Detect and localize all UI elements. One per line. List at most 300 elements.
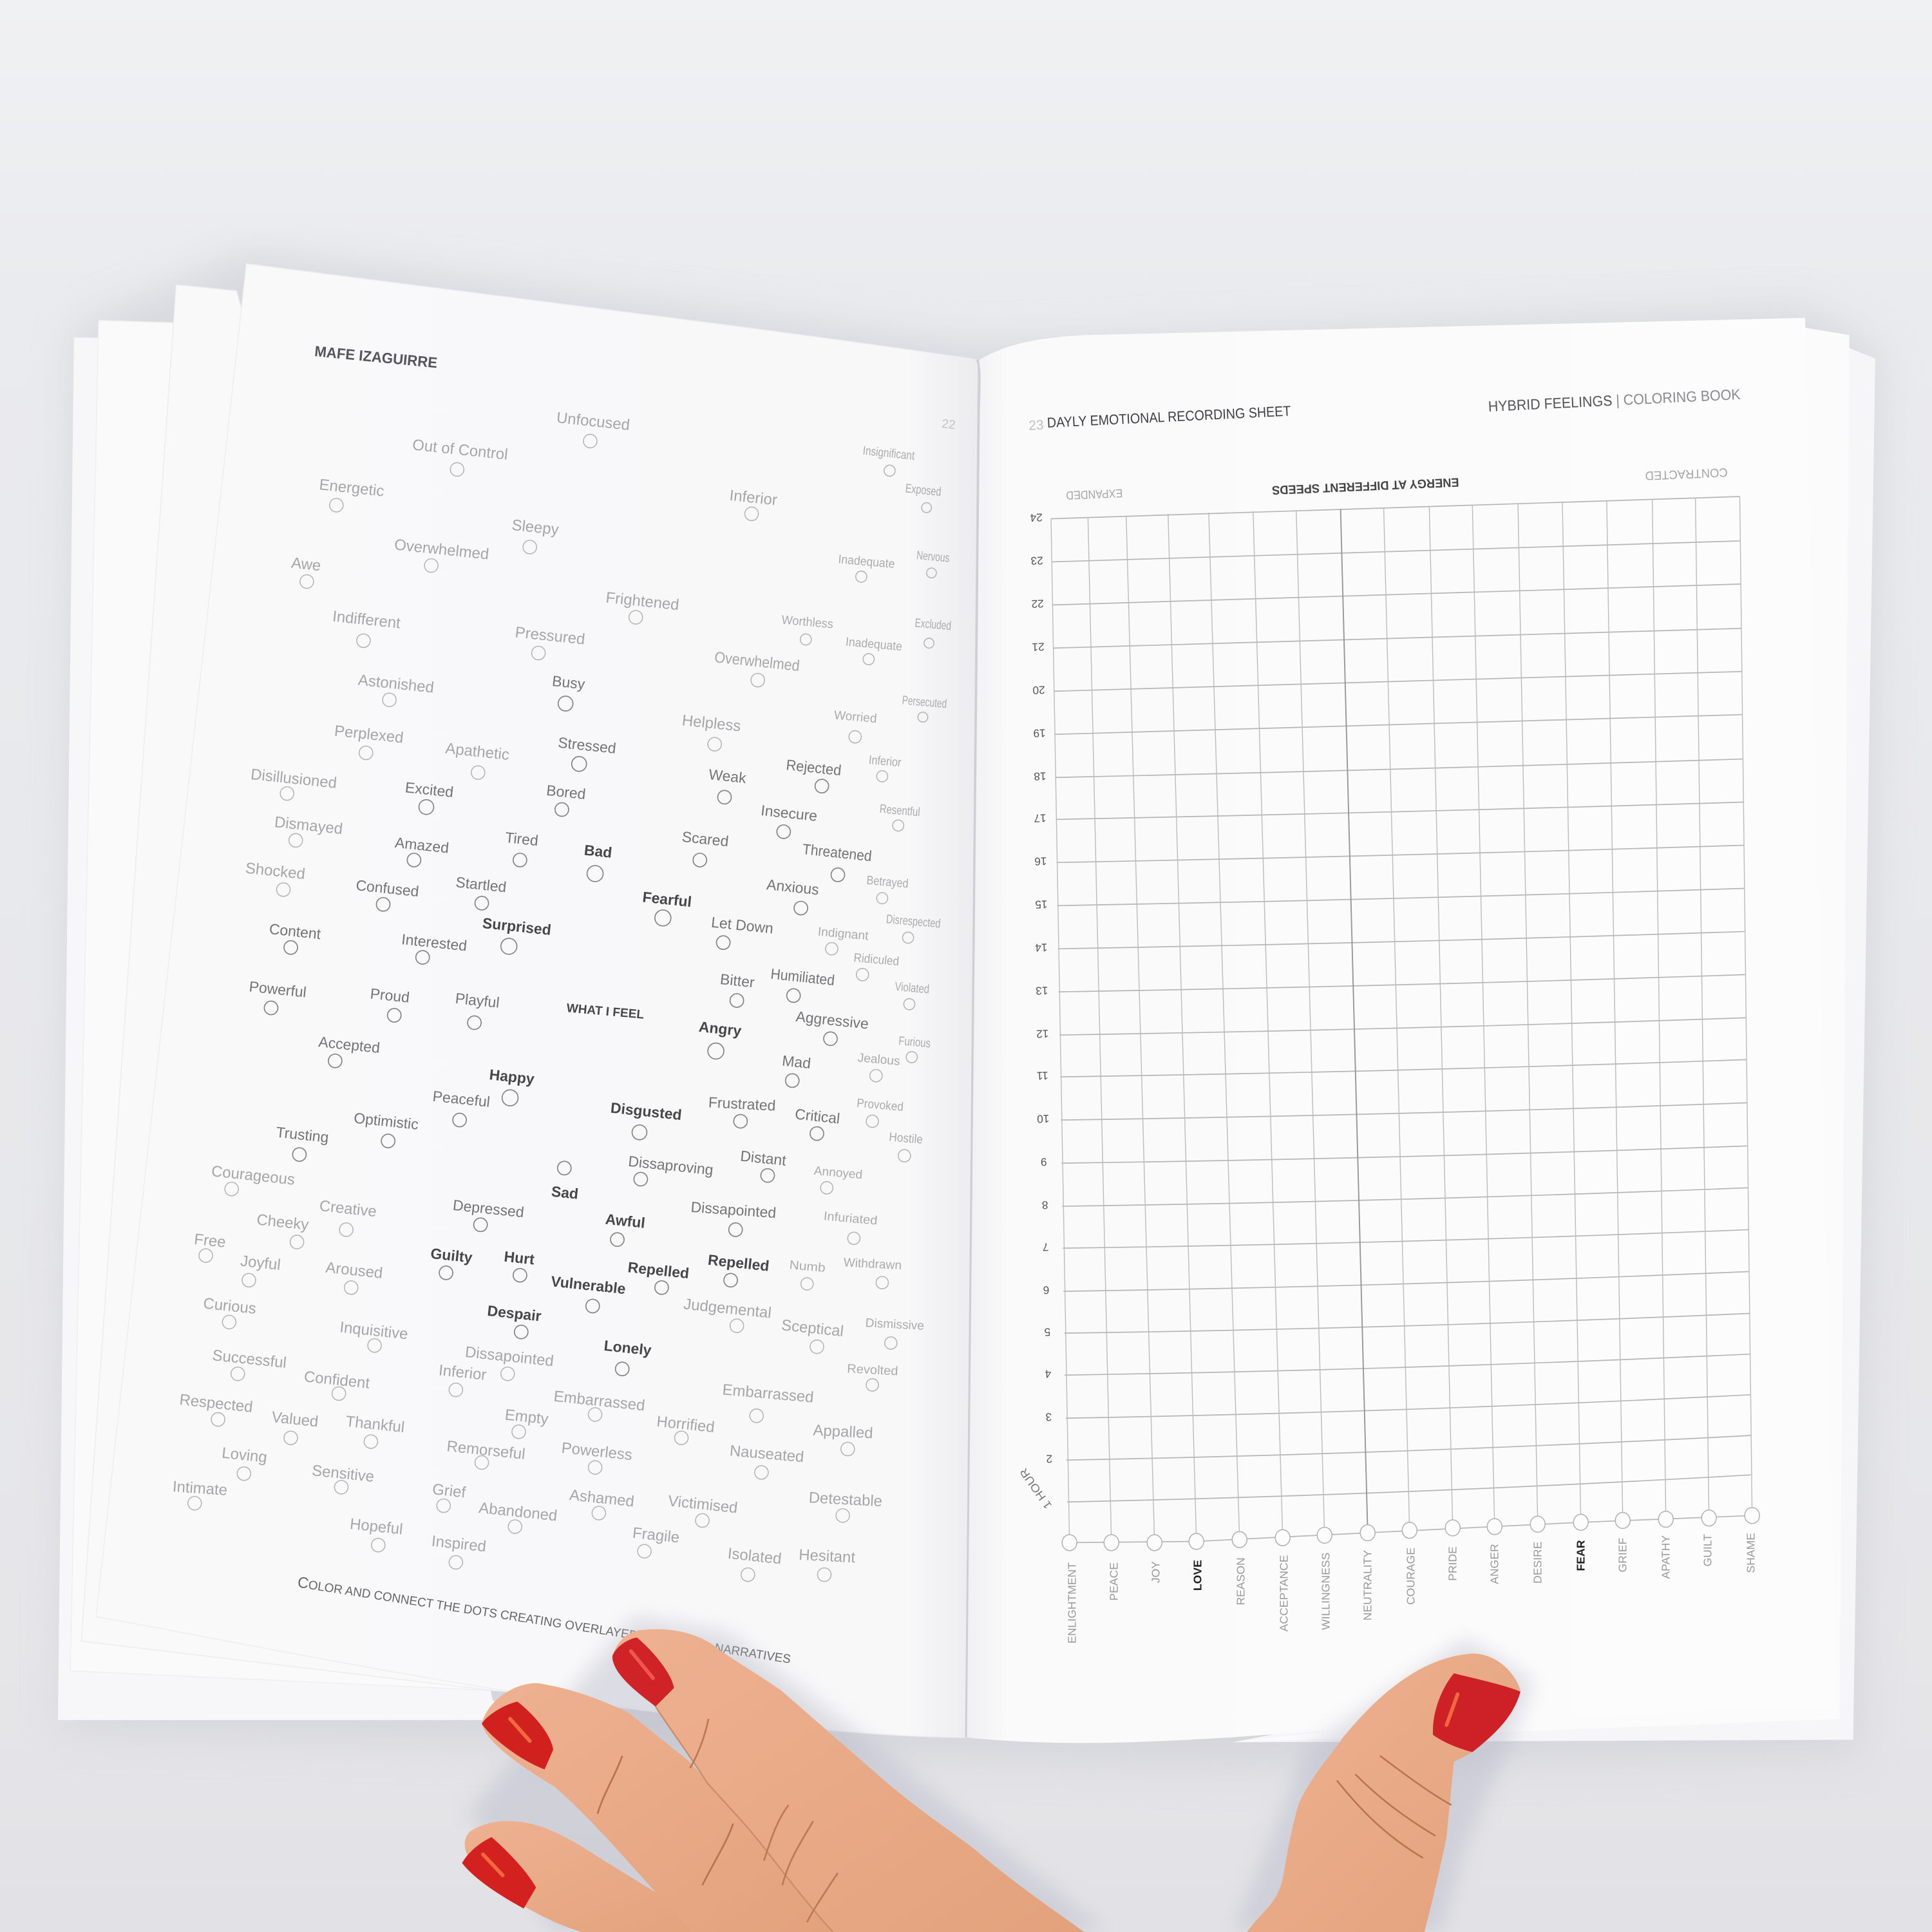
word: Despair: Despair: [486, 1302, 542, 1325]
word: Scared: Scared: [681, 828, 730, 849]
word: Resentful: [879, 801, 921, 831]
word: Playful: [455, 990, 500, 1030]
grid horizontal hour lines: [1051, 497, 1751, 1502]
word: Anxious: [766, 876, 820, 915]
word: Fearful: [642, 888, 692, 926]
word: Indignant: [817, 925, 869, 955]
emotion scale labels: REASON: [1234, 1557, 1247, 1605]
word: Abandoned: Abandoned: [478, 1499, 558, 1525]
hour axis numbers: [1030, 511, 1052, 1466]
right under-page stack: [1232, 328, 1875, 1742]
word: Indifferent: [332, 608, 401, 647]
word: Dissapointed: Dissapointed: [464, 1343, 554, 1370]
word: Energetic: [318, 476, 385, 512]
word: Revolted: Revolted: [847, 1362, 898, 1378]
emotion scale labels: DESIRE: [1531, 1541, 1544, 1584]
word: Insecure: Insecure: [760, 802, 818, 824]
word: Excluded: [914, 616, 952, 648]
page number 23: 23: [1028, 418, 1044, 433]
hour axis numbers: 14: [1035, 941, 1048, 954]
word: Perplexed: Perplexed: [334, 722, 404, 747]
word: Unfocused: Unfocused: [556, 409, 630, 434]
left under-page stack: [58, 285, 616, 1720]
word: Powerless: Powerless: [561, 1439, 633, 1464]
word: Startled: [455, 873, 507, 910]
word: Threatened: [802, 840, 873, 882]
word: Annoyed: Annoyed: [813, 1164, 863, 1182]
word: Inferior: Inferior: [868, 753, 902, 770]
finger: middle: [612, 1629, 1084, 1932]
word: Violated: Violated: [895, 979, 930, 996]
instruction caption: COLOR AND CONNECT THE DOTS CREATING OVERLAYED EMOTIONAL NARRATIVES: [296, 1574, 792, 1667]
hour axis numbers: 21: [1032, 640, 1045, 654]
word: Frightened: Frightened: [605, 589, 680, 614]
word: Aggressive: [795, 1008, 869, 1045]
hour axis numbers: 20: [1032, 683, 1045, 697]
word: Courageous: Courageous: [211, 1162, 296, 1189]
word: Disrespected: Disrespected: [886, 912, 941, 931]
word: Content: [269, 920, 322, 954]
author name: MAFE IZAGUIRRE: [314, 343, 438, 371]
hour axis numbers: 24: [1030, 511, 1043, 524]
hour axis numbers: 23: [1030, 554, 1043, 567]
word: Hesitant: Hesitant: [799, 1546, 856, 1566]
word: Inferior: [438, 1361, 488, 1397]
word: Jealous: [857, 1051, 900, 1082]
word: Threatened: Threatened: [802, 840, 873, 864]
word: Sceptical: [781, 1316, 844, 1354]
book shadow: [62, 252, 1879, 1768]
hour axis numbers: 17: [1034, 811, 1046, 825]
word: Bad: [583, 842, 613, 882]
word: Peaceful: Peaceful: [432, 1088, 491, 1110]
hour axis numbers: 4: [1045, 1367, 1052, 1381]
word: Loving: Loving: [221, 1444, 268, 1466]
word: Revolted: [847, 1362, 898, 1391]
word: Shocked: Shocked: [245, 860, 306, 883]
hour axis numbers: 11: [1037, 1069, 1048, 1083]
word: Inspired: Inspired: [431, 1533, 487, 1555]
word: Repelled: [707, 1251, 770, 1287]
word: Inquisitive: Inquisitive: [339, 1319, 409, 1343]
word: Lonely: Lonely: [603, 1337, 652, 1359]
upside-down label: contracted: CONTRACTED: [1645, 465, 1728, 482]
word: Accepted: [317, 1033, 381, 1068]
center heading: what i feel: WHAT I FEEL: [566, 1001, 645, 1022]
word: Peaceful: [432, 1088, 491, 1127]
word: Out of Control: Out of Control: [412, 436, 509, 464]
upside-down heading: energy at different speeds: ENERGY AT DIFFERENT SPEEDS: [1271, 475, 1459, 497]
book gutter: [966, 360, 980, 1738]
word: Interested: Interested: [401, 931, 468, 954]
emotion scale labels: ANGER: [1488, 1544, 1501, 1584]
word: Furious: [898, 1033, 931, 1063]
word: Critical: [794, 1106, 841, 1141]
hour axis numbers: 2: [1046, 1452, 1052, 1466]
word: Despair: [486, 1302, 542, 1339]
word: Cheeky: [256, 1211, 310, 1249]
word: Intimate: Intimate: [172, 1478, 228, 1499]
hour axis numbers: 12: [1036, 1027, 1049, 1041]
word: Overwhelmed: Overwhelmed: [393, 536, 489, 564]
word: Playful: Playful: [455, 990, 500, 1011]
word: Humiliated: [770, 965, 835, 1002]
word: Humiliated: Humiliated: [770, 965, 835, 989]
word: Worthless: Worthless: [781, 612, 834, 631]
word: Nauseated: [729, 1442, 804, 1479]
word: Tired: Tired: [504, 829, 539, 849]
word: Dissapointed: Dissapointed: [690, 1198, 777, 1221]
word: Dismayed: Dismayed: [274, 813, 343, 838]
word: Persecuted: [902, 693, 947, 722]
word: Numb: [789, 1258, 826, 1290]
word: Depressed: [452, 1197, 525, 1231]
word: Scared: [681, 828, 730, 867]
word: Sensitive: Sensitive: [311, 1462, 375, 1486]
emotion scale labels: FEAR: [1574, 1540, 1587, 1571]
word: Provoked: [856, 1096, 904, 1128]
word: Fragile: Fragile: [632, 1524, 680, 1546]
word: Busy: Busy: [551, 672, 586, 692]
word: Stressed: Stressed: [557, 734, 617, 757]
word: Apathetic: [444, 740, 510, 779]
word: Hurt: [504, 1248, 535, 1282]
hour axis numbers: 7: [1042, 1240, 1049, 1254]
word: Confused: [355, 876, 420, 911]
word: Overwhelmed: [714, 648, 800, 687]
word: Sad: Sad: [551, 1183, 579, 1202]
word: Hostile: [889, 1130, 923, 1162]
hour axis numbers: 13: [1036, 984, 1048, 998]
word: Loving: [221, 1444, 268, 1481]
word: Awful: [605, 1211, 646, 1246]
word: Inadequate: [838, 552, 895, 582]
word: Aggressive: Aggressive: [795, 1008, 869, 1032]
word: Proud: [370, 985, 410, 1022]
word: Hesitant: [799, 1546, 856, 1582]
word: Trusting: [275, 1124, 330, 1161]
emotion scale labels: ENLIGHTMENT: [1065, 1562, 1078, 1643]
word: Ashamed: Ashamed: [569, 1486, 635, 1510]
emotion scale labels: JOY: [1149, 1561, 1162, 1583]
word: Intimate: [172, 1478, 228, 1510]
word: Insecure: [760, 802, 818, 838]
word: Hopeful: Hopeful: [349, 1515, 404, 1538]
word: Grief: Grief: [431, 1481, 467, 1501]
word: Guilty: Guilty: [430, 1245, 473, 1266]
word: Angry: Angry: [698, 1018, 743, 1039]
word: Worried: Worried: [833, 708, 877, 726]
word: Successful: Successful: [211, 1347, 287, 1372]
hand: fingers: [462, 1629, 1520, 1932]
word: Happy: [489, 1066, 535, 1106]
word: Let Down: [710, 914, 774, 949]
word: Surprised: Surprised: [482, 914, 552, 938]
finger: pinky: [462, 1821, 727, 1932]
word: Empty: Empty: [504, 1406, 549, 1428]
word: Anxious: Anxious: [766, 876, 820, 898]
word: Repelled: Repelled: [707, 1251, 770, 1274]
emotion scale labels: GRIEF: [1616, 1538, 1629, 1573]
word: Ridiculed: Ridiculed: [853, 951, 900, 968]
word: Shocked: [245, 860, 306, 896]
word: Out of Control: [412, 436, 509, 476]
word: Confident: Confident: [303, 1368, 371, 1392]
hour axis numbers: 9: [1041, 1155, 1047, 1169]
word: Weak: [708, 766, 747, 804]
word: Surprised: [482, 914, 552, 954]
word: Happy: Happy: [489, 1066, 535, 1088]
axis label: 1 hour: 1 HOUR: [1017, 1466, 1054, 1511]
sheet title: DAYLY EMOTIONAL RECORDING SHEET: [1046, 402, 1291, 431]
word: Inadequate: Inadequate: [845, 634, 903, 653]
word: Joyful: [240, 1253, 281, 1287]
word: Helpless: [681, 712, 742, 751]
emotion scale labels: PEACE: [1107, 1562, 1120, 1601]
word: Frustrated: Frustrated: [708, 1094, 776, 1114]
word: Inferior: [728, 487, 778, 520]
word: Joyful: Joyful: [240, 1253, 281, 1274]
word: Free: Free: [193, 1231, 227, 1251]
word: Busy: [551, 672, 586, 711]
word: Betrayed: [866, 873, 909, 904]
word: Sceptical: Sceptical: [781, 1316, 844, 1340]
word: Persecuted: Persecuted: [902, 693, 947, 711]
word: Inspired: [431, 1533, 487, 1569]
word: Dismissive: Dismissive: [865, 1316, 925, 1333]
word: Bitter: [719, 971, 755, 1007]
word: Bored: [545, 782, 587, 817]
word: Lonely: [603, 1337, 652, 1376]
word: Repelled: [627, 1258, 690, 1294]
word: Aroused: Aroused: [325, 1259, 384, 1282]
word: Ridiculed: [853, 951, 900, 981]
word: Startled: Startled: [455, 873, 507, 895]
word: Embarrassed: Embarrassed: [722, 1381, 815, 1406]
word: Powerful: Powerful: [249, 978, 307, 1001]
word: Inferior: Inferior: [728, 487, 778, 509]
word: Annoyed: [813, 1164, 863, 1194]
emotion scale labels: PRIDE: [1446, 1546, 1459, 1581]
word: Sleepy: [511, 516, 560, 554]
finger shadows: [468, 1616, 1534, 1932]
word: Sad: [551, 1161, 579, 1202]
word: Remorseful: Remorseful: [446, 1437, 526, 1463]
hour axis numbers: 10: [1037, 1112, 1050, 1126]
word: Exposed: [905, 481, 942, 513]
word: Repelled: Repelled: [627, 1258, 690, 1282]
word: Let Down: Let Down: [710, 914, 774, 937]
word: Appalled: [813, 1421, 873, 1456]
word: Dismissive: [865, 1316, 925, 1349]
word: Judgemental: Judgemental: [683, 1296, 772, 1322]
page number 22: 22: [941, 417, 956, 432]
word: Overwhelmed: Overwhelmed: [714, 648, 800, 674]
word: Creative: Creative: [319, 1197, 377, 1220]
word: Unfocused: [556, 409, 630, 448]
word: Curious: [202, 1295, 257, 1329]
emotion scale labels: SHAME: [1744, 1533, 1757, 1573]
word: Pressured: [515, 623, 586, 660]
word: Nervous: [916, 548, 950, 578]
word: Thankful: Thankful: [345, 1413, 405, 1436]
hour axis numbers: 5: [1044, 1325, 1051, 1339]
word: Worthless: [781, 612, 834, 645]
word: Optimistic: [353, 1110, 419, 1148]
emotion scale labels: LOVE: [1191, 1560, 1204, 1591]
hour axis numbers: 19: [1033, 726, 1046, 740]
word: Empty: [504, 1406, 549, 1439]
word: Furious: Furious: [898, 1033, 931, 1050]
word: Proud: Proud: [370, 985, 410, 1006]
word: Creative: [319, 1197, 377, 1236]
word: Content: Content: [269, 920, 322, 942]
hour axis numbers: 18: [1034, 770, 1046, 783]
emotion scale labels: WILLINGNESS: [1319, 1553, 1332, 1630]
word: Jealous: Jealous: [857, 1051, 900, 1068]
word: Vulnerable: [550, 1273, 627, 1313]
word: Detestable: Detestable: [808, 1489, 883, 1510]
word: Amazed: Amazed: [394, 834, 450, 857]
word: Excited: Excited: [404, 779, 454, 800]
word: Free: [193, 1231, 227, 1262]
word: Pressured: Pressured: [515, 623, 586, 649]
word: Awful: Awful: [605, 1211, 646, 1231]
word: Amazed: [394, 834, 450, 867]
word: Embarrassed: [722, 1381, 815, 1423]
word: Thankful: [345, 1413, 405, 1448]
word: Mad: [781, 1052, 811, 1087]
emotion scale labels: ACCEPTANCE: [1277, 1555, 1290, 1631]
word: Withdrawn: [843, 1256, 902, 1289]
word: Nauseated: Nauseated: [729, 1442, 804, 1466]
word: Respected: Respected: [178, 1391, 254, 1416]
word: Horrified: Horrified: [656, 1413, 715, 1436]
word: Frustrated: [708, 1094, 776, 1128]
word: Distant: Distant: [739, 1148, 788, 1169]
word: Hopeful: [349, 1515, 404, 1552]
word: Awe: [290, 554, 322, 589]
word: Bitter: Bitter: [719, 971, 755, 990]
hour axis numbers: 15: [1035, 898, 1048, 911]
word: Excited: [404, 779, 454, 815]
word: Mad: Mad: [781, 1052, 811, 1072]
word: Astonished: Astonished: [357, 671, 435, 697]
word: Worried: [833, 708, 877, 743]
word: Hurt: Hurt: [504, 1248, 535, 1268]
word: Inferior: Inferior: [438, 1361, 488, 1384]
word: Depressed: Depressed: [452, 1197, 525, 1220]
word: Aroused: [325, 1259, 384, 1294]
chart: emotional recording grid: [1051, 497, 1752, 1542]
word: Sleepy: Sleepy: [511, 516, 560, 538]
word: Violated: [895, 979, 930, 1010]
upside-down label: expanded: EXPANDED: [1066, 487, 1123, 502]
word: Rejected: Rejected: [785, 757, 842, 779]
hour axis numbers: 3: [1045, 1410, 1052, 1424]
word: Victimised: Victimised: [667, 1492, 739, 1517]
word: Isolated: [727, 1545, 782, 1582]
word: Confused: Confused: [355, 876, 420, 900]
word: Stressed: [557, 734, 617, 772]
word: Vulnerable: Vulnerable: [550, 1273, 627, 1297]
word: Disrespected: [886, 912, 941, 943]
hour axis numbers: 8: [1042, 1198, 1048, 1212]
word: Dissaproving: Dissaproving: [627, 1153, 714, 1179]
word: Resentful: Resentful: [879, 801, 921, 819]
word: Indifferent: Indifferent: [332, 608, 401, 632]
word: Valued: [271, 1408, 319, 1444]
hour axis numbers: 22: [1031, 597, 1044, 611]
word: Provoked: Provoked: [856, 1096, 904, 1113]
word: Detestable: [808, 1489, 883, 1522]
book title: HYBRID FEELINGS | COLORING BOOK: [1488, 386, 1741, 415]
emotion scale labels: APATHY: [1659, 1535, 1672, 1579]
panel: left page: [96, 263, 977, 1738]
word: Trusting: Trusting: [275, 1124, 330, 1146]
word: Energetic: Energetic: [318, 476, 385, 500]
emotion scale labels: NEUTRALITY: [1361, 1550, 1374, 1620]
emotion scale labels: [1065, 1533, 1757, 1643]
word: Insignificant: [862, 443, 916, 476]
word: Withdrawn: Withdrawn: [843, 1256, 902, 1273]
word: Fragile: [632, 1524, 680, 1558]
word: Appalled: Appalled: [813, 1421, 873, 1442]
word: Hostile: Hostile: [889, 1130, 923, 1146]
word: Disillusioned: Disillusioned: [250, 766, 337, 792]
word: Grief: [431, 1481, 467, 1513]
word: Critical: Critical: [794, 1106, 841, 1127]
word: Infuriated: Infuriated: [823, 1209, 878, 1227]
word: Bad: Bad: [583, 842, 613, 861]
word: Inadequate: [845, 634, 903, 665]
word: Nervous: Nervous: [916, 548, 950, 565]
word: Inadequate: Inadequate: [838, 552, 895, 571]
word: Perplexed: [334, 722, 404, 760]
word: Infuriated: [823, 1209, 878, 1244]
word: Guilty: [430, 1245, 473, 1280]
emotion scale dots: [1062, 1508, 1759, 1551]
word: Powerful: [249, 978, 307, 1015]
word: Distant: [739, 1148, 788, 1182]
word: Helpless: Helpless: [681, 712, 742, 735]
word: Curious: Curious: [202, 1295, 257, 1318]
emotion scale labels: GUILT: [1701, 1534, 1714, 1567]
word: Embarrassed: Embarrassed: [553, 1388, 646, 1414]
finger: thumb: [1247, 1654, 1520, 1932]
word: Weak: Weak: [708, 766, 747, 786]
feeling wheel words and dots: [172, 409, 952, 1582]
grid vertical emotion lines: [1051, 497, 1752, 1542]
word: Bored: Bored: [545, 782, 587, 802]
word: Fearful: Fearful: [642, 888, 692, 910]
word: Apathetic: Apathetic: [444, 740, 510, 764]
word: Numb: Numb: [789, 1258, 826, 1275]
word: Accepted: Accepted: [317, 1033, 381, 1056]
emotion scale labels: COURAGE: [1404, 1548, 1417, 1605]
word: Disgusted: [610, 1099, 683, 1140]
panel: right page: [965, 318, 1836, 1743]
word: Excluded: Excluded: [914, 616, 952, 633]
word: Insignificant: Insignificant: [862, 443, 916, 462]
word: Angry: [698, 1018, 743, 1059]
word: Isolated: Isolated: [727, 1545, 782, 1567]
word: Optimistic: Optimistic: [353, 1110, 419, 1133]
word: Betrayed: Betrayed: [866, 873, 909, 891]
word: Cheeky: Cheeky: [256, 1211, 310, 1234]
word: Valued: Valued: [271, 1408, 319, 1430]
word: Inferior: [868, 753, 902, 782]
